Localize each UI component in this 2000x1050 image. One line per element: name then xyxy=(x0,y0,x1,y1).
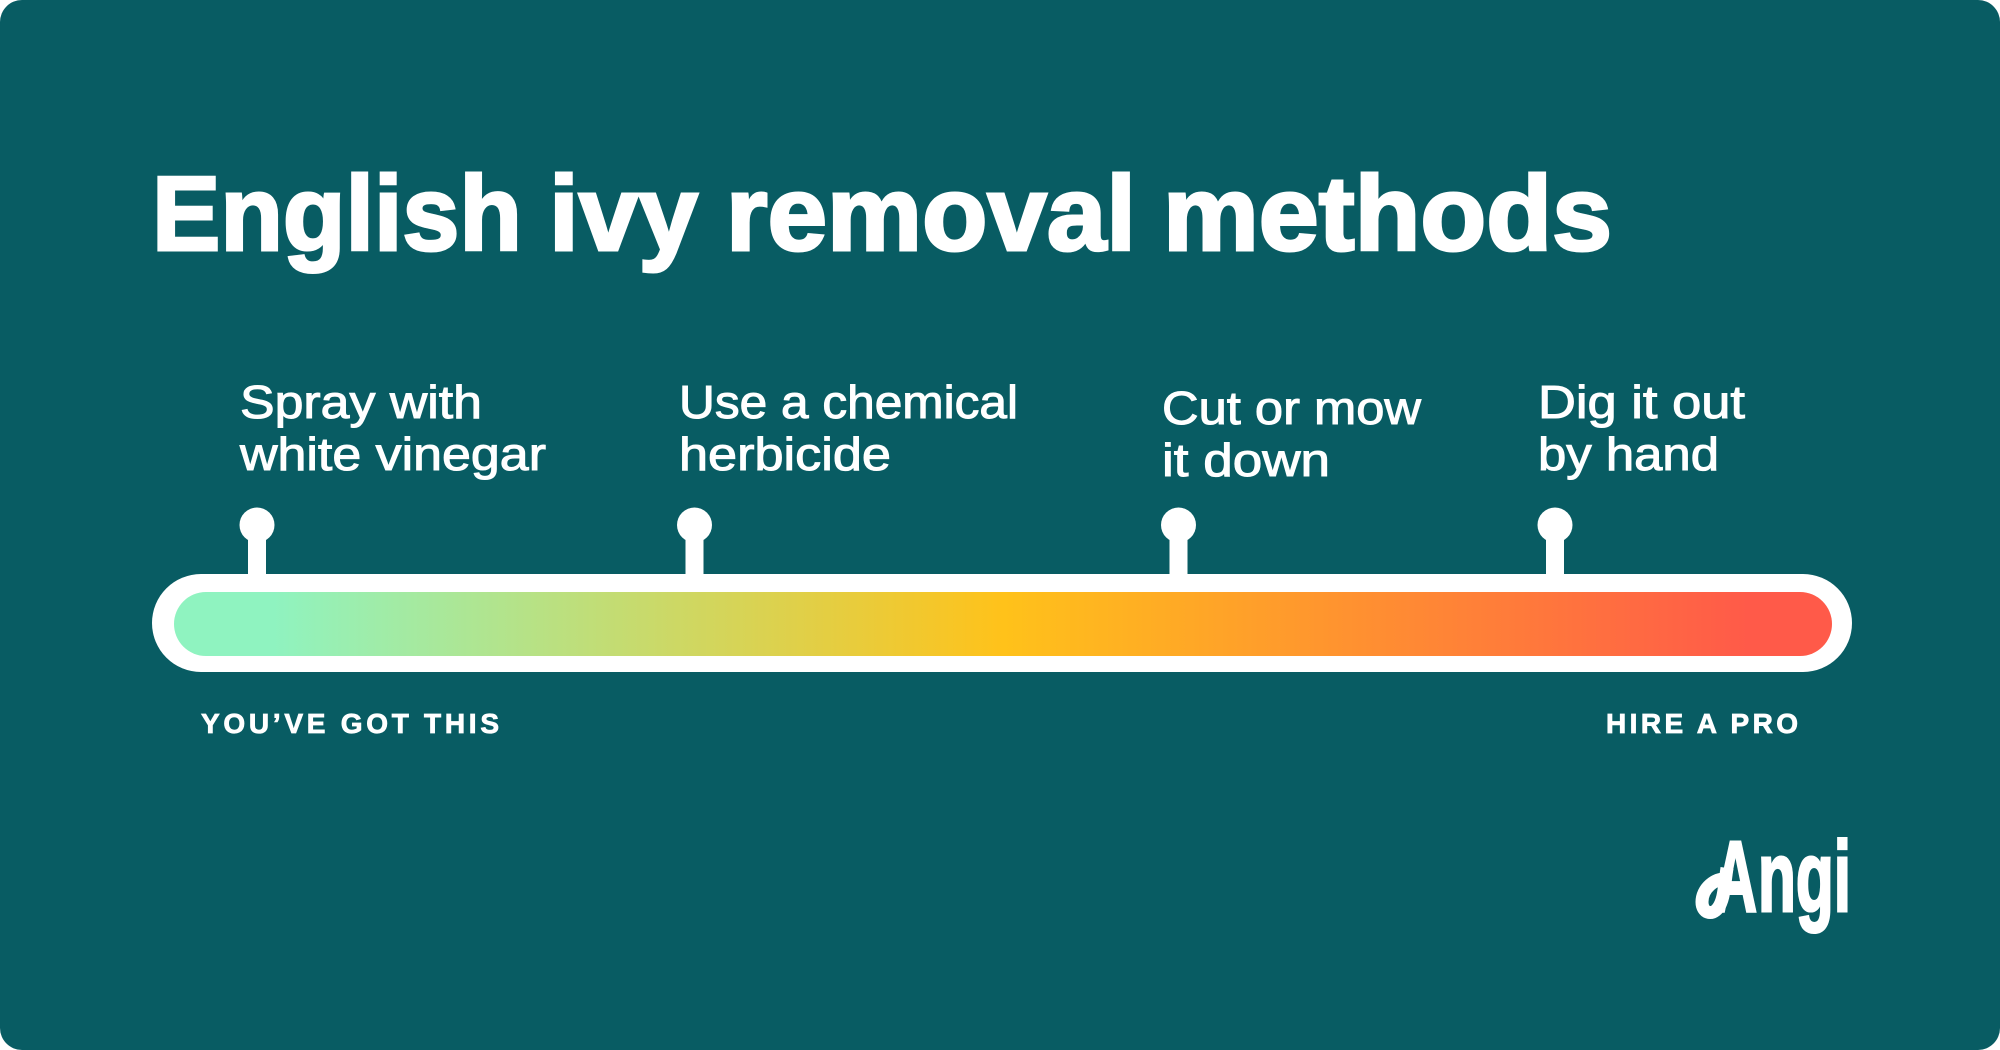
marker pin 3 xyxy=(1161,508,1196,580)
marker pin 1 xyxy=(240,508,274,580)
marker pin 4 xyxy=(1538,508,1572,580)
title: methods xyxy=(1163,155,1612,273)
label: dig it out by hand xyxy=(1538,376,1745,480)
label: use a chemical herbicide: Use a chemical xyxy=(679,376,1018,428)
label: use a chemical herbicide: herbicide xyxy=(679,428,891,480)
title: ivy xyxy=(549,155,698,273)
title: removal xyxy=(726,155,1136,273)
logo: Angi xyxy=(1702,821,1851,933)
scale label: hire a pro: HIRE A PRO xyxy=(1606,708,1798,739)
title xyxy=(152,155,1612,273)
label: spray with white vinegar: Spray with xyxy=(240,376,482,428)
label: spray with white vinegar: white vinegar xyxy=(239,428,546,480)
label: spray with white vinegar xyxy=(239,376,546,480)
label: cut or mow it down xyxy=(1162,382,1422,486)
label: cut or mow it down: Cut or mow xyxy=(1162,382,1422,434)
logo: Angi: A xyxy=(1714,821,1757,933)
label: dig it out by hand: Dig it out xyxy=(1538,376,1745,428)
logo: Angi: ngi xyxy=(1758,821,1851,933)
difficulty scale bar xyxy=(152,574,1852,672)
label: dig it out by hand: by hand xyxy=(1538,428,1719,480)
label: use a chemical herbicide xyxy=(679,376,1018,480)
scale label: you've got this: YOU’VE GOT THIS xyxy=(201,708,499,739)
label: cut or mow it down: it down xyxy=(1162,434,1330,486)
marker pin 2 xyxy=(677,508,712,580)
title: English xyxy=(152,155,522,273)
